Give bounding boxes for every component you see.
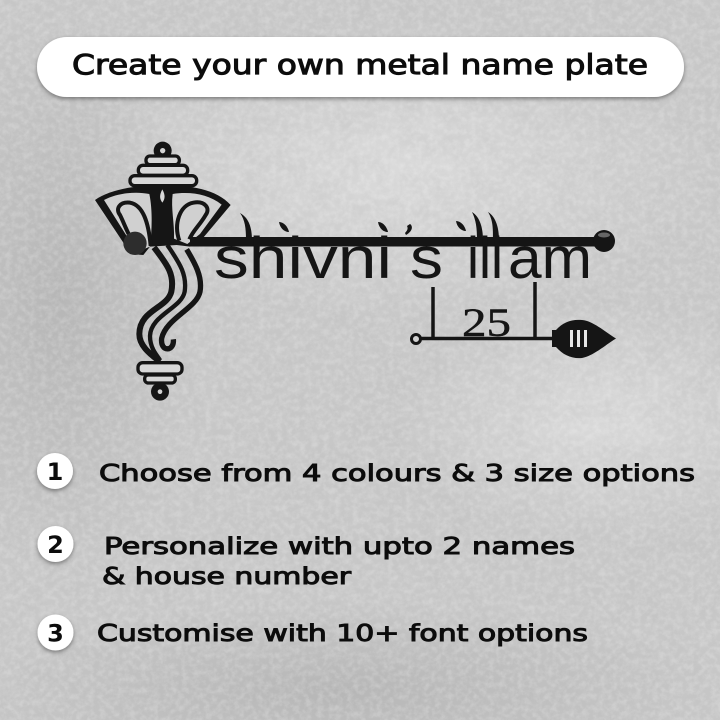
name lettering: am xyxy=(508,226,592,291)
step 3 xyxy=(38,614,588,650)
name lettering: ill xyxy=(467,226,503,291)
base tiers xyxy=(138,363,182,383)
top rod xyxy=(190,230,615,252)
left ear arch xyxy=(118,203,151,246)
badge 2 xyxy=(38,526,74,562)
crown knob xyxy=(154,142,172,160)
badge 1: 1 xyxy=(47,458,63,486)
name lettering xyxy=(214,212,592,291)
step 2 text: & house number xyxy=(102,562,351,590)
title text: Create your own metal name plate xyxy=(72,49,648,81)
step 2 xyxy=(38,526,575,590)
apostrophe xyxy=(405,224,412,235)
right ear arch xyxy=(177,202,207,241)
title pill xyxy=(37,37,684,97)
metal name plate xyxy=(95,142,616,401)
crown tiers xyxy=(130,156,197,186)
badge 3 xyxy=(38,614,74,650)
badge 1 xyxy=(37,453,73,489)
forehead mark xyxy=(160,189,165,203)
step 1 text: Choose from 4 colours & 3 size options xyxy=(99,459,695,487)
arrowhead xyxy=(552,320,616,358)
badge 2: 2 xyxy=(47,531,64,559)
step 3 text: Customise with 10+ font options xyxy=(97,619,588,647)
step 2 text: Personalize with upto 2 names xyxy=(104,532,575,560)
right ear cutout xyxy=(172,193,222,244)
base knob xyxy=(151,383,169,401)
trunk xyxy=(139,245,201,362)
head and ears xyxy=(95,185,231,255)
house number frame xyxy=(412,282,556,344)
name lettering: shivni xyxy=(214,226,392,291)
mounting screw xyxy=(123,232,147,255)
ascender strokes xyxy=(240,213,252,240)
i-dot leaves xyxy=(279,222,289,232)
step 1 xyxy=(37,453,695,489)
name lettering: s xyxy=(410,226,443,291)
left ear cutout xyxy=(104,193,152,249)
house number: 25 xyxy=(462,300,511,345)
icon: Ganesha xyxy=(95,142,231,401)
badge 3: 3 xyxy=(47,620,64,648)
step 2 text xyxy=(102,532,575,590)
